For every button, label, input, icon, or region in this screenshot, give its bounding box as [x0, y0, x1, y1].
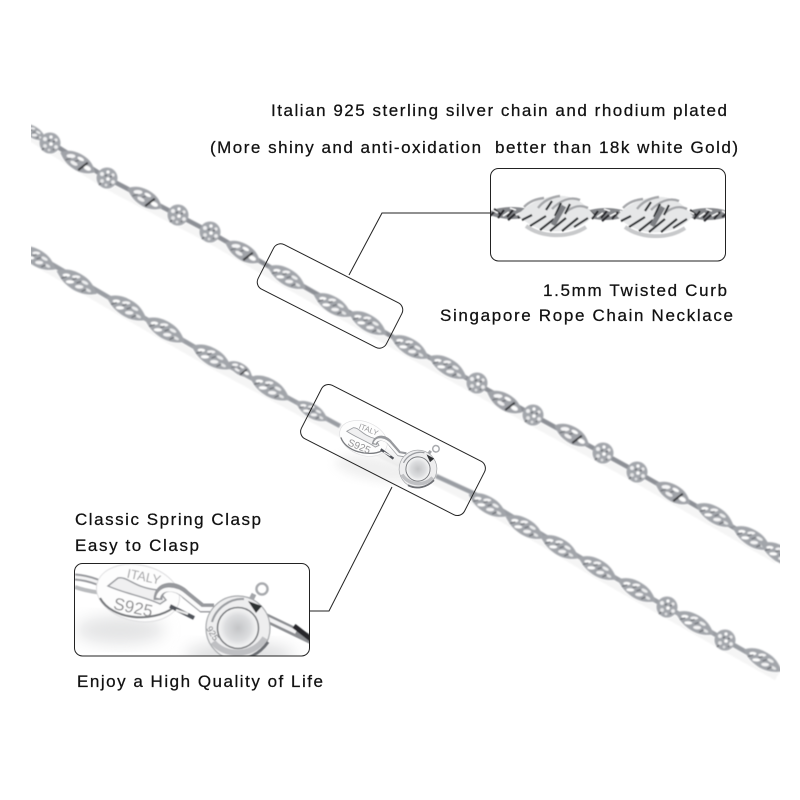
upper chain: [17, 120, 800, 572]
magnified rope chain: [486, 196, 734, 236]
rope chain label line 1: 1.5mm Twisted Curb: [543, 281, 727, 300]
clasp label line 1: Classic Spring Clasp: [75, 510, 261, 529]
small clasp: [339, 420, 440, 488]
tagline: Enjoy a High Quality of Life: [77, 672, 323, 691]
heading line 2: (More shiny and anti-oxidation better than 18k white Gold): [210, 138, 738, 157]
magnified clasp: S925: [112, 594, 155, 621]
small clasp: S925: [346, 438, 372, 457]
arrow: leader line to clasp zoom: [310, 487, 392, 611]
callout frame on rope chain: [254, 241, 406, 351]
heading line 1: Italian 925 sterling silver chain and rhodium plated: [271, 101, 727, 120]
lower chain with small clasp: [14, 240, 786, 678]
small clasp: ITALY: [358, 422, 380, 438]
magnified clasp: [75, 564, 309, 656]
clasp label line 2: Easy to Clasp: [75, 536, 199, 555]
magnified clasp: ITALY: [126, 566, 163, 588]
arrow: leader line to rope chain zoom: [349, 213, 490, 275]
magnified clasp: 925: [204, 624, 221, 642]
callout: rope chain zoom box: [486, 168, 734, 261]
rope chain label line 2: Singapore Rope Chain Necklace: [440, 306, 733, 325]
callout frame on clasp: [298, 382, 488, 518]
callout: clasp zoom box: [74, 563, 310, 656]
